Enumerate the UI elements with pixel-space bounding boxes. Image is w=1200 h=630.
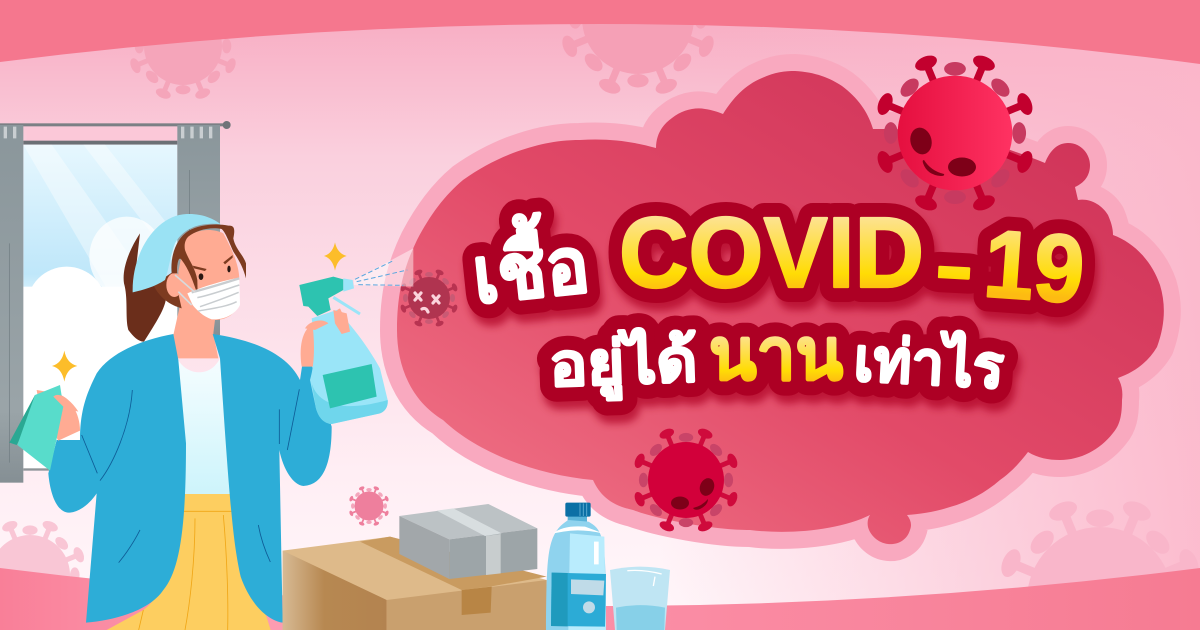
spray cone — [354, 248, 413, 287]
title line 2: อยู่ได้ — [548, 325, 699, 403]
bottle label — [323, 364, 377, 408]
title line 1: - — [933, 217, 976, 315]
bottle body — [310, 310, 388, 424]
face mask — [175, 275, 240, 319]
window and curtains — [0, 121, 231, 483]
ghost virus: top left — [128, 0, 238, 101]
nozzle tip — [343, 278, 354, 292]
title outline: อยู่ได้ — [548, 325, 699, 403]
title outline shadow — [470, 205, 1091, 411]
spray bottle — [299, 248, 413, 424]
bottom virus — [633, 427, 739, 533]
skirt — [107, 494, 271, 630]
title outline: เชื้อ — [467, 207, 593, 320]
boxes and bottle — [283, 503, 670, 630]
face and neck — [173, 230, 239, 358]
spray dashes — [355, 261, 407, 285]
left hand — [37, 390, 80, 441]
water glass — [610, 567, 670, 630]
title outline: - — [933, 217, 976, 315]
title — [467, 197, 1091, 411]
ponytail — [124, 233, 166, 342]
title outline shadow: - — [936, 225, 979, 323]
title line 1: COVID — [619, 197, 924, 309]
top pink band — [0, 0, 1200, 64]
title outline: 19 — [981, 210, 1088, 324]
water bottle — [546, 503, 606, 630]
left curtain — [0, 125, 23, 483]
title line 2 — [548, 315, 1006, 403]
title line 1: เชื้อ — [467, 207, 593, 320]
title line 1 — [467, 197, 1088, 324]
virus face: x eyes — [415, 293, 439, 312]
woman — [9, 214, 413, 630]
trigger — [333, 297, 360, 314]
title outline: นาน — [709, 315, 843, 395]
grey box — [399, 504, 537, 579]
hair behind ear — [153, 272, 182, 308]
ear — [166, 273, 182, 297]
title outline shadow: 19 — [984, 218, 1091, 332]
thumb — [53, 395, 78, 412]
head scarf — [133, 214, 221, 292]
title line 1: 19 — [981, 210, 1088, 324]
shirt — [178, 358, 232, 495]
head details — [133, 214, 246, 319]
virus face — [671, 476, 717, 510]
fingers — [305, 310, 350, 334]
cardboard box — [283, 537, 547, 630]
sparkle: left — [52, 351, 77, 382]
bottle bottom shade — [312, 383, 388, 424]
valance panel — [27, 128, 177, 141]
jacket — [48, 334, 332, 623]
big virus — [875, 53, 1035, 213]
title outline: COVID — [619, 197, 924, 309]
title outline shadow: COVID — [622, 205, 927, 317]
title outline — [467, 197, 1088, 403]
clouds — [23, 217, 177, 469]
ghost virus: bottom left — [0, 519, 86, 595]
sparkle: bottle — [324, 242, 347, 271]
right curtain — [5, 125, 220, 335]
eyes and brows — [193, 255, 233, 280]
ghost virus: top centre — [559, 0, 717, 97]
red speech cloud — [397, 71, 1164, 544]
title outline shadow: อยู่ได้ — [551, 333, 702, 411]
small pink virus: window — [107, 165, 139, 197]
cloth — [9, 385, 63, 471]
right hand — [301, 308, 350, 367]
title line 2: นาน — [709, 315, 843, 395]
title outline: เท่าไร — [852, 324, 1006, 401]
small pink virus: near box — [349, 486, 389, 526]
title line 2: เท่าไร — [852, 324, 1006, 401]
title outline shadow: เชื้อ — [470, 215, 596, 328]
virus face — [907, 125, 976, 176]
title outline shadow: นาน — [712, 323, 846, 403]
title outline shadow: เท่าไร — [855, 332, 1009, 409]
bottom pink band — [0, 568, 1200, 630]
window glass — [23, 145, 177, 469]
nozzle — [299, 277, 343, 316]
ghost virus: bottom right — [998, 498, 1200, 600]
light beams — [23, 145, 177, 410]
front hair — [171, 225, 246, 295]
jacket creases — [82, 389, 299, 563]
window sill — [23, 468, 180, 471]
dead virus — [400, 269, 458, 327]
curtain rod — [0, 121, 231, 129]
window frame top — [23, 141, 177, 145]
